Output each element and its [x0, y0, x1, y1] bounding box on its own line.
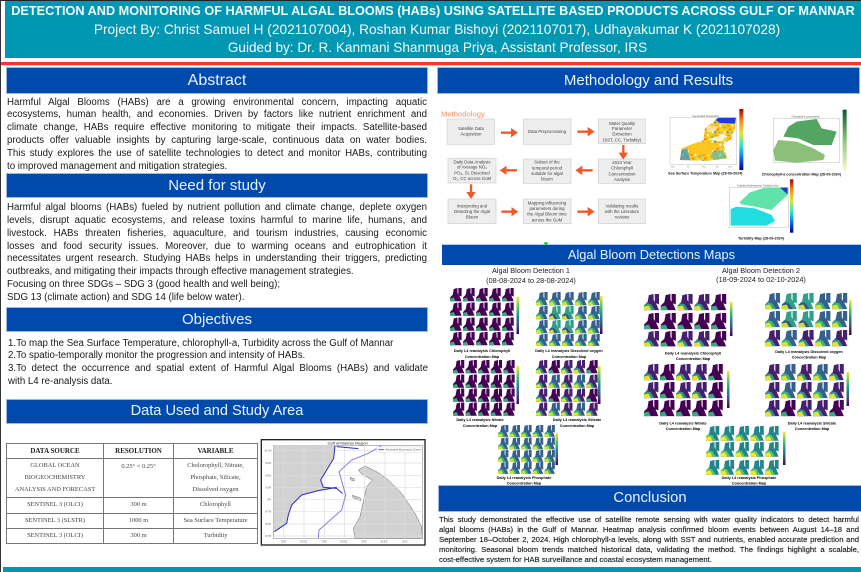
heading: methodology and results: Methodology and Results	[564, 72, 733, 89]
heading: data used and study area: Data Used and Study Area	[131, 403, 303, 419]
map: chlorophyll-a	[773, 110, 847, 171]
D1 silicate panel: Concentration Map	[560, 424, 595, 428]
diagram: methodology flowchart: the Algal Bloom time	[527, 212, 567, 217]
map: Gulf of Mannar study area: 78°E	[281, 541, 287, 543]
table: data sources: ANALYSIS AND FORECAST	[15, 486, 95, 493]
table: data sources: Sea Surface Temperature	[183, 517, 248, 524]
diagram: methodology flowchart: Mapping influencing	[528, 201, 567, 206]
heading: detection 2: Algal Bloom Detection 2	[722, 266, 800, 275]
D1 chlorophyll panel: Daily L4 reanalysis Chlorophyll	[454, 349, 510, 353]
D2 phosphate panel: Concentration Map	[732, 482, 767, 486]
map: sea surface temperature: Sea Surface Temperature	[692, 115, 720, 118]
table: data sources: SENTINEL 3 (OLCI)	[27, 532, 83, 539]
heading: objectives	[7, 308, 427, 331]
diagram: methodology flowchart: Analysis	[614, 177, 630, 182]
diagram: methodology flowchart: across the GoM	[532, 217, 563, 222]
diagram: methodology flowchart: of Average NO₃	[457, 165, 487, 170]
diagram: methodology flowchart: Parameter	[612, 126, 633, 131]
map: Gulf of Mannar study area: 8.2°N	[265, 536, 272, 538]
map: Gulf of Mannar study area	[260, 439, 426, 546]
map: sea surface temperature	[670, 109, 743, 170]
diagram: methodology flowchart: Extraction	[612, 132, 632, 137]
map: Gulf of Mannar study area: 80°E	[362, 541, 367, 543]
heading: data used and study area	[7, 400, 427, 423]
table: data sources: Turbidity	[204, 532, 227, 539]
text: objectives: 2.To spatio-temporally monitor the progression and intensity of HABs.	[8, 350, 305, 361]
guide: Guided by: Dr. R. Kanmani Shanmuga Priya, Assistant Professor, IRS	[228, 40, 647, 54]
D2 chlorophyll panel	[644, 294, 732, 361]
heading: abstract	[7, 68, 427, 93]
text: need for study: necessitates urgent research. Studying HABs helps in understanding their triggers, predicting	[7, 253, 427, 264]
date range: detection 2: (18-09-2024 to 02-10-2024)	[716, 275, 806, 284]
text: conclusion: September 18–October 2, 2024. High chlorophyll-a levels, along with SST and nutrients, enabled accurate prediction and	[439, 535, 859, 544]
D1 silicate panel	[536, 360, 601, 428]
diagram: methodology flowchart: Subset of the	[534, 160, 560, 165]
D1 phosphate panel	[497, 425, 558, 486]
table: data sources: Chlorophyll	[200, 501, 231, 508]
text: need for study: Harmful algal blooms (HABs) fueled by nutrient pollution and climate change, deplete oxygen	[7, 202, 427, 213]
text: need for study: losses and food security issues. Moreover, due to warming oceans and eutrophication it	[7, 241, 427, 252]
text: abstract: climate change, HABs require effective monitoring to mitigate their impacts. Satellite-based	[7, 122, 427, 133]
land: Sri Lanka	[353, 466, 422, 538]
heading: objectives: Objectives	[182, 311, 252, 328]
diagram: methodology flowchart: temporal period	[532, 165, 563, 170]
heading: methodology and results	[438, 68, 859, 93]
diagram: methodology flowchart: (SST, CC, Turbidity)	[603, 137, 642, 142]
diagram: methodology flowchart: Acquisition	[461, 132, 482, 137]
diagram: methodology flowchart: Satellite Data	[458, 126, 484, 131]
table: data sources: VARIABLE	[197, 447, 234, 455]
text: objectives	[8, 338, 428, 387]
table: data sources: SENTINEL 3 (SLSTR)	[25, 517, 85, 524]
text: abstract	[7, 96, 427, 172]
map: Gulf of Mannar study area: 9°N	[267, 500, 272, 502]
table: data sources: SENTINEL 3 (OLCI)	[27, 501, 83, 508]
text: conclusion: This study demonstrated the effective use of satellite remote sensing with water quality indicators to detect harmful	[439, 514, 859, 524]
map: Gulf of Mannar study area: 9.6°N	[265, 475, 272, 477]
map: Gulf of Mannar study area: 81°E	[402, 541, 408, 543]
table: data sources: 1000 m	[129, 517, 148, 524]
D2 chlorophyll panel: Daily L4 reanalysis Chlorophyll	[665, 352, 721, 356]
date range: detection 1: (08-08-2024 to 28-08-2024)	[486, 276, 576, 285]
diagram: methodology flowchart: Concentration	[609, 171, 636, 176]
diagram: methodology flowchart: Water Quality	[609, 121, 636, 126]
D1 phosphate panel: Daily L4 reanalysis Phosphate	[497, 476, 551, 480]
heading: detection 1: Algal Bloom Detection 1	[492, 266, 570, 275]
satellite maps: SST, chlorophyll, turbidity	[668, 109, 847, 241]
diagram: methodology flowchart	[441, 110, 646, 224]
table: data sources: 0.25° × 0.25°	[121, 463, 156, 470]
heading: algal bloom detections maps	[442, 245, 861, 264]
caption: turbidity map: Turbidity Map (28-09-2024)	[738, 237, 785, 241]
D1 chlorophyll panel	[450, 288, 519, 359]
legend: exclusive economic zone	[377, 447, 421, 452]
map: turbidity	[729, 179, 793, 233]
diagram: methodology flowchart: parameters during	[529, 206, 565, 211]
D2 nitrate panel: Concentration Map	[666, 427, 701, 431]
text: abstract: ecosystems, human health, and economies. Driven by factors like nutrient enrichment and	[7, 109, 427, 120]
D1 chlorophyll panel: Concentration Map	[465, 355, 500, 359]
text: need for study: livestock. HABs threaten fisheries, aquaculture, and tourism industries, causing economic	[7, 228, 427, 239]
D2 dissolved oxygen panel	[765, 293, 852, 360]
D1 dissolved oxygen panel	[535, 292, 603, 359]
table: data sources	[6, 443, 258, 544]
map: Gulf of Mannar study area: 8.5°N	[265, 524, 272, 526]
header background	[5, 1, 861, 58]
D1 dissolved oxygen panel: Concentration Map	[552, 355, 587, 359]
D1 nitrate panel: Daily L4 reanalysis Nitrate	[456, 418, 504, 422]
map: sea surface temperature: 79	[687, 167, 690, 169]
text: abstract: This study explores the use of satellite technologies to detect and monitor HABs, contributing	[7, 148, 427, 159]
D2 silicate panel	[765, 364, 849, 431]
diagram: methodology flowchart: Interpreting and	[457, 203, 488, 208]
header banner	[5, 1, 861, 58]
map: Gulf of Mannar study area: 80.5°E	[381, 541, 388, 543]
map: Gulf of Mannar study area: 10.1°N	[264, 451, 272, 453]
table: data sources: Phosphate, Silicate,	[190, 474, 241, 481]
table: data sources: 300 m	[130, 501, 147, 508]
D2 silicate panel: Concentration Map	[795, 427, 830, 431]
text: abstract: to improved management and mitigation strategies.	[7, 161, 227, 172]
text: need for study: levels, disrupt aquatic ecosystems, and release toxins harmful to marine life, humans, and	[7, 215, 427, 226]
text: conclusion: algal blooms (HABs) in the Gulf of Mannar. Heatmap analysis confirmed bloom events between August 14–18 and	[439, 525, 859, 534]
diagram: methodology flowchart: PO₄, Si, Dissolved	[454, 170, 490, 175]
line: exclusive economic zone	[318, 446, 382, 538]
D2 chlorophyll panel: Concentration Map	[676, 357, 711, 361]
map: sea surface temperature: 80.5	[728, 167, 733, 169]
D1 nitrate panel: Concentration Map	[463, 424, 498, 428]
map: turbidity: Turbidity (Nephelometric Turbidity Units)	[737, 184, 779, 187]
divider line	[442, 244, 861, 245]
heading: conclusion: Conclusion	[613, 490, 687, 506]
table: data sources: Cholorophyll, Nitrate,	[187, 462, 244, 469]
map: Gulf of Mannar study area: 78.5°E	[300, 541, 307, 543]
text: objectives: 3.To detect the occurrence and spatial extent of Harmful Algal Blooms (HABs) and validate	[8, 363, 428, 374]
map: chlorophyll-a: Chlorophyll-a concentration	[791, 115, 821, 118]
diagram: methodology flowchart: Data Preprocessing	[528, 129, 567, 134]
D2 phosphate panel	[706, 426, 786, 486]
diagram: methodology flowchart: 2024 Year	[612, 160, 632, 165]
text: conclusion	[439, 514, 859, 564]
table: data sources: GLOBAL OCEAN	[30, 462, 80, 469]
text: need for study: outbreaks, and mitigating their impacts through effective management strategies.	[7, 266, 354, 277]
D2 nitrate panel	[644, 364, 730, 431]
left dark edge	[0, 0, 1, 572]
table: data sources: Dissolved oxygen	[192, 486, 238, 493]
heading: need for study: Need for study	[168, 177, 266, 194]
land: India	[273, 446, 337, 532]
diagram: methodology flowchart: reviews	[615, 215, 629, 220]
table: data sources: BIOGEOCHEMISTRY	[25, 474, 85, 481]
text: need for study: SDG 13 (climate action) and SDG 14 (life below water).	[7, 292, 244, 303]
map: Gulf of Mannar study area: 79°E	[322, 541, 327, 543]
footer band	[3, 566, 861, 572]
D2 dissolved oxygen panel: Concentration Map	[792, 356, 827, 360]
heading: algal bloom detections maps: Algal Bloom Detections Maps	[568, 247, 735, 262]
marker: green dot	[544, 242, 548, 245]
heading: need for study	[7, 174, 427, 197]
diagram: methodology flowchart: Bloom	[466, 215, 479, 220]
heading: abstract: Abstract	[188, 72, 246, 89]
project authors: Project By: Christ Samuel H (2021107004), Roshan Kumar Bishoyi (2021107017), Udhayakumar K (2021107028)	[94, 22, 780, 36]
D2 nitrate panel: Daily L4 reanalysis Nitrate	[659, 422, 707, 426]
text: abstract: products offer valuable insights by capturing large-scale, continuous data on water bodies.	[7, 135, 427, 146]
caption: chlorophyll map: Chlorophyll-a concentration Map (28-09-2024)	[762, 173, 842, 177]
text: conclusion: cost-effective system for HAB surveillance and coastal ecosystem management.	[439, 555, 712, 564]
D2 phosphate panel: Daily L4 reanalysis Phosphate	[722, 476, 776, 480]
table: data sources: DATA SOURCE	[30, 447, 80, 455]
map: Gulf of Mannar study area: 9.3°N	[265, 487, 272, 489]
map: sea surface temperature: 79.5	[702, 167, 706, 169]
diagram: methodology flowchart: Daily Data Analysis	[453, 159, 491, 164]
map: sea surface temperature: 80	[716, 167, 719, 169]
diagram: methodology flowchart: suitable for algal	[531, 171, 563, 176]
diagram: methodology flowchart: Detecting the Algal	[454, 209, 490, 214]
D1 dissolved oxygen panel: Daily L4 reanalysis Dissolved oxygen	[535, 349, 603, 353]
text: need for study	[7, 202, 427, 303]
map title: Gulf of Mannar Region	[328, 441, 368, 446]
diagram: methodology flowchart: Chlorophyll	[611, 166, 633, 171]
D1 silicate panel: Daily L4 reanalysis Silicate	[553, 418, 601, 422]
text: conclusion: monitoring. Seasonal bloom trends matched historical data, validating the method. The findings highlight a scalable,	[439, 545, 859, 554]
text: objectives: with L4 re-analysis data.	[8, 376, 112, 387]
map: Gulf of Mannar study area: 9.9°N	[265, 463, 272, 465]
D2 silicate panel: Daily L4 reanalysis Silicate	[788, 422, 836, 426]
text: abstract: Harmful Algal Blooms (HABs) are a growing environmental concern, impacting aquatic	[7, 96, 427, 108]
diagram: methodology flowchart: bloom	[541, 177, 553, 182]
table: data sources: RESOLUTION	[115, 447, 162, 455]
text: objectives: 1.To map the Sea Surface Temperature, chlorophyll-a, Turbidity across the Gulf of Mannar	[8, 338, 393, 348]
coast: blue bloom boundary	[274, 446, 358, 532]
table: data sources: 300 m	[130, 532, 147, 539]
diagram: methodology flowchart: Validating results	[606, 203, 638, 208]
D2 dissolved oxygen panel: Daily L4 reanalysis Dissolved oxygen	[775, 350, 843, 354]
diagram: methodology flowchart: with the Literature	[605, 209, 640, 214]
legend: exclusive economic zone: Exclusive Economic Zone	[386, 448, 420, 452]
map: sea surface temperature: 78.5	[671, 167, 675, 169]
map: Gulf of Mannar study area: 79.5°E	[340, 541, 347, 543]
D1 nitrate panel	[453, 360, 519, 428]
map: Gulf of Mannar study area: 8.7°N	[265, 512, 272, 514]
heading: conclusion	[439, 486, 861, 511]
text: need for study: Focusing on three SDGs – SDG 3 (good health and well being);	[7, 279, 280, 290]
caption: SST map: Sea Surface Temperature Map (28-09-2024)	[668, 172, 743, 176]
top dark edge	[0, 0, 861, 1]
red divider	[1, 62, 861, 65]
D1 phosphate panel: Concentration Map	[507, 482, 542, 486]
title: DETECTION AND MONITORING OF HARMFUL ALGAL BLOOMS (HABs) USING SATELLITE BASED PRODUCTS ACROSS GULF OF MANNAR	[11, 4, 855, 18]
diagram: methodology flowchart: O₂, CC across GoM	[453, 176, 492, 181]
method title: Methodology	[441, 110, 485, 119]
